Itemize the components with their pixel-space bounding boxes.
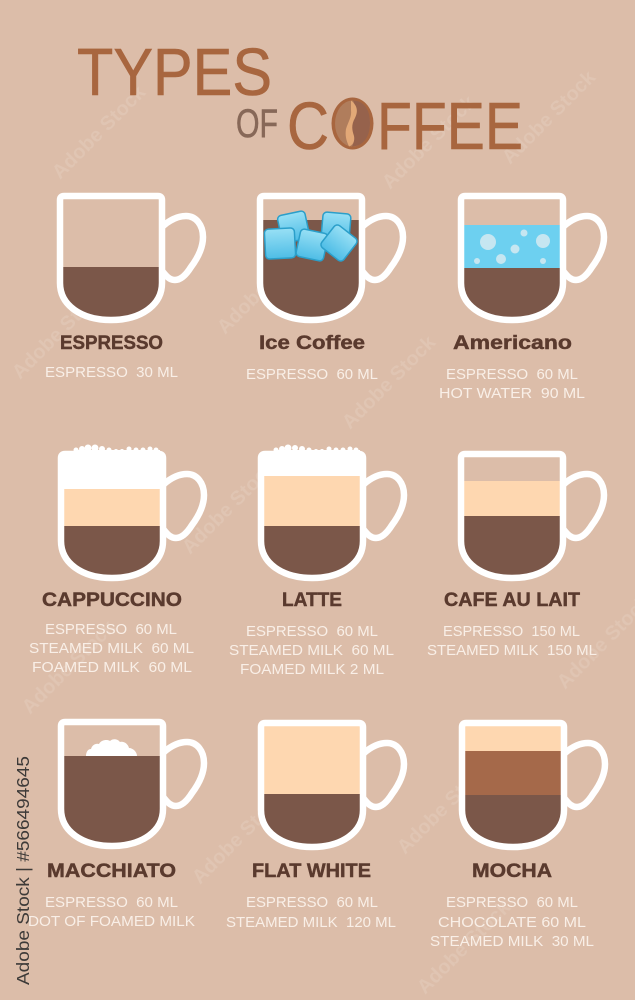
mug: americano: [458, 196, 604, 328]
panel: flat white: [226, 720, 404, 931]
mug: cappuccino: [58, 444, 204, 586]
ingredients: mocha: ESPRESSO 60 ML: [446, 894, 578, 911]
title: TYPES: TYPES: [77, 35, 272, 110]
ingredients: espresso: ESPRESSO 30 ML: [45, 364, 178, 381]
mug: latte: [258, 444, 404, 586]
text: Adobe Stock: [413, 896, 516, 999]
ingredients: cappuccino: ESPRESSO 60 ML: [45, 621, 177, 638]
ingredients: americano: HOT WATER 90 ML: [439, 385, 585, 402]
ingredients: latte: [229, 623, 394, 678]
title: C: C: [287, 89, 329, 164]
text: Adobe Stock: [213, 236, 316, 339]
heading: cafe au lait: CAFE AU LAIT: [444, 589, 580, 611]
ingredients: flat white: STEAMED MILK 120 ML: [226, 914, 396, 931]
mug: ice coffee: [257, 196, 403, 327]
ingredients: cappuccino: [29, 621, 194, 676]
heading: ice coffee: Ice Coffee: [259, 332, 365, 354]
foam dot: [86, 739, 137, 756]
ingredients: americano: ESPRESSO 60 ML: [446, 366, 578, 383]
mug: mocha: [459, 720, 605, 855]
text: Adobe Stock: [498, 66, 601, 169]
panel: mocha: [430, 720, 605, 950]
heading: espresso: ESPRESSO: [60, 332, 163, 354]
text: Adobe Stock: [378, 91, 481, 194]
mug: espresso: [57, 196, 203, 327]
title: OF: OF: [236, 102, 278, 146]
ingredients: macchiato: DOT OF FOAMED MILK: [28, 913, 195, 930]
ingredients: cafe au lait: STEAMED MILK 150 ML: [427, 642, 597, 659]
ingredients: latte: STEAMED MILK 60 ML: [229, 642, 394, 659]
icon: coffee bean O: [332, 98, 374, 150]
foam: [74, 444, 160, 454]
heading: macchiato: MACCHIATO: [47, 860, 176, 882]
ingredients: mocha: CHOCOLATE 60 ML: [438, 914, 586, 931]
text: Adobe Stock: [338, 331, 441, 434]
text: Adobe Stock: [48, 81, 151, 184]
panel: cappuccino: [29, 444, 204, 676]
panel: espresso: [45, 196, 203, 381]
ingredients: cappuccino: FOAMED MILK 60 ML: [32, 659, 192, 676]
text: Adobe Stock: [8, 281, 111, 384]
heading: cappuccino: CAPPUCCINO: [42, 589, 182, 611]
ingredients: cappuccino: STEAMED MILK 60 ML: [29, 640, 194, 657]
heading: latte: LATTE: [282, 589, 342, 611]
panel: ice coffee: [246, 196, 403, 383]
icon: ice cubes: [264, 210, 359, 263]
title: FFEE: FFEE: [377, 89, 523, 164]
panel: americano: [439, 196, 604, 402]
ingredients: latte: ESPRESSO 60 ML: [246, 623, 378, 640]
mug: cafe au lait: [458, 454, 604, 586]
ingredients: americano: [439, 366, 585, 402]
heading: mocha: MOCHA: [472, 860, 552, 882]
ingredients: flat white: ESPRESSO 60 ML: [246, 894, 378, 911]
heading: americano: Americano: [453, 332, 572, 354]
text: Adobe Stock: [188, 786, 291, 889]
text: Adobe Stock: [18, 616, 121, 719]
text: Adobe Stock: [178, 456, 281, 559]
heading: flat white: FLAT WHITE: [252, 860, 371, 882]
text: Adobe Stock: [393, 756, 496, 859]
panel: cafe au lait: [427, 454, 604, 659]
ingredients: mocha: [430, 894, 594, 950]
ingredients: macchiato: ESPRESSO 60 ML: [45, 894, 178, 911]
bubbles: [474, 230, 550, 264]
title: [77, 35, 523, 164]
ingredients: cafe au lait: [427, 623, 597, 659]
ingredients: macchiato: [28, 894, 195, 930]
panel: latte: [229, 444, 404, 678]
mug: macchiato: [58, 722, 204, 854]
ingredients: latte: FOAMED MILK 2 ML: [240, 661, 384, 678]
stock id text: Adobe Stock | #566494645: [13, 756, 33, 985]
foam: [274, 444, 360, 454]
ingredients: ice coffee: ESPRESSO 60 ML: [246, 366, 378, 383]
ingredients: cafe au lait: ESPRESSO 150 ML: [443, 623, 580, 640]
panel: macchiato: [28, 722, 204, 930]
mug: flat white: [258, 720, 404, 854]
ingredients: flat white: [226, 894, 396, 931]
ingredients: mocha: STEAMED MILK 30 ML: [430, 933, 594, 950]
